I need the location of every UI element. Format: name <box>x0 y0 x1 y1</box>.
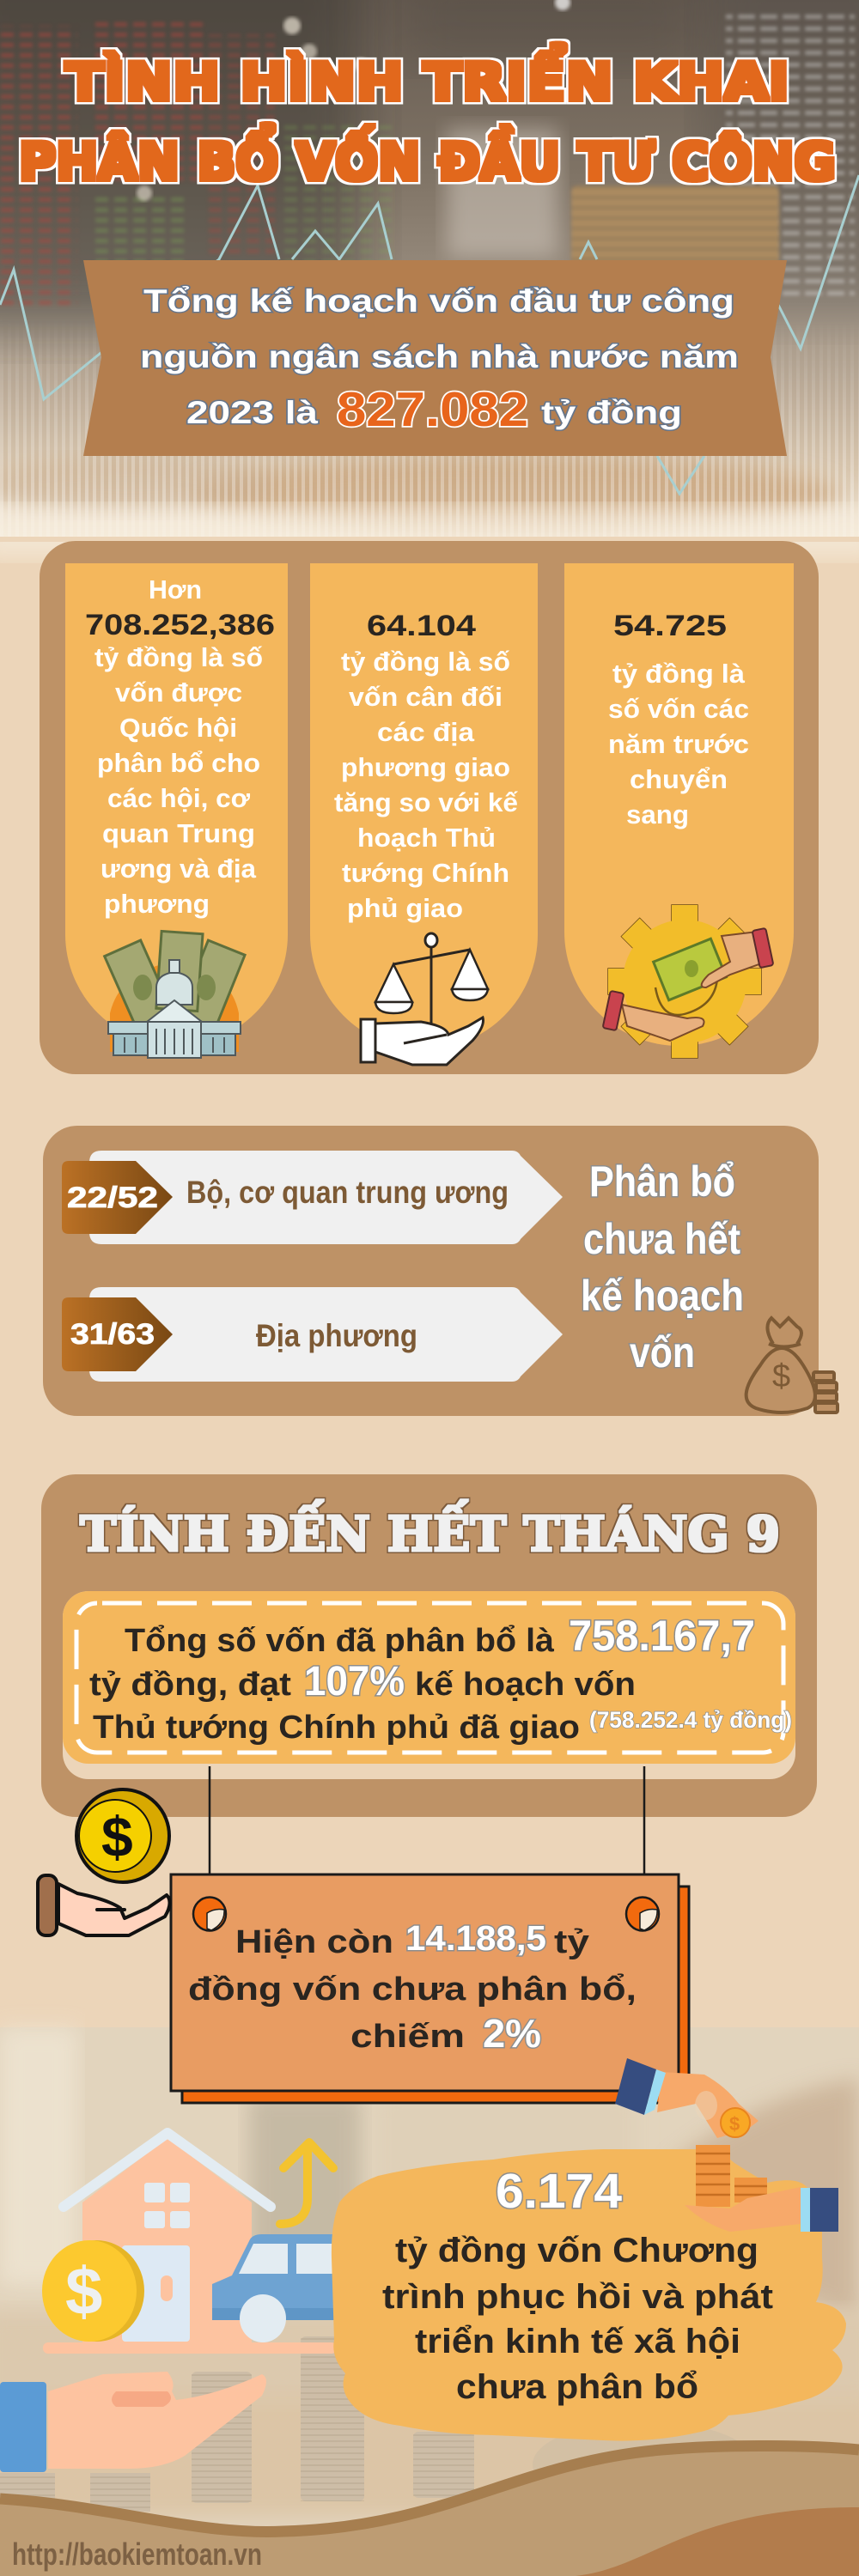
column 1: 708.252,386: vốn được <box>115 677 242 708</box>
allocated summary box: Thủ tướng Chính phủ đã giao <box>93 1710 580 1746</box>
title <box>19 42 836 192</box>
header photo background <box>0 0 859 558</box>
icon: scales on hand <box>361 933 488 1065</box>
icon: money and capitol <box>105 931 245 1058</box>
banner: total plan: nguồn ngân sách nhà nước năm <box>140 339 739 374</box>
icon: money bag <box>746 1318 838 1413</box>
footer url: http://baokiemtoan.vn <box>12 2537 262 2572</box>
hanging strings <box>210 1766 644 1914</box>
heading: allocation not complete <box>581 1157 744 1376</box>
column 1: 708.252,386: phân bổ cho <box>97 748 260 778</box>
callout blob: 6.174: triển kinh tế xã hội <box>415 2323 740 2360</box>
sign hole left <box>193 1898 226 1930</box>
banner: total plan: 827.082 <box>337 382 528 437</box>
sign: remaining unallocated <box>171 1874 689 2103</box>
allocated summary box: kế hoạch vốn <box>415 1667 636 1703</box>
callout blob: 6.174: 6.174 <box>496 2164 622 2219</box>
allocated summary box <box>63 1591 795 1779</box>
column 2: 64.104: 64.104 <box>367 610 476 642</box>
column 2: 64.104: tướng Chính <box>342 858 509 888</box>
row: ministries arrow: 22/52 <box>67 1182 158 1214</box>
row: ministries arrow: Bộ, cơ quan trung ương <box>186 1175 509 1210</box>
banner: total plan: 2023 là <box>186 395 319 430</box>
column 1: 708.252,386: tỷ đồng là số <box>94 642 263 672</box>
panel: as of end of September <box>41 1474 817 1817</box>
illustration: house, car and coin on hand <box>0 2133 337 2472</box>
row: ministries arrow <box>62 1151 563 1244</box>
column 1: 708.252,386: Hơn <box>149 574 202 605</box>
column 2: 64.104: vốn cân đối <box>349 682 503 712</box>
sign: remaining unallocated: 2% <box>483 2011 541 2056</box>
banner: total plan <box>83 260 787 456</box>
icon: dollar coin <box>42 2240 144 2342</box>
column 1: 708.252,386: quan Trung <box>102 818 255 848</box>
panel: three capital figures <box>40 541 819 1074</box>
bottom photo background <box>0 2027 859 2576</box>
icon: gear and money exchange <box>603 905 773 1058</box>
banner: total plan: tỷ đồng <box>541 395 682 430</box>
title: PHÂN BỔ VỐN ĐẦU TƯ CÔNG <box>19 122 836 192</box>
column 3: 54.725: chuyển <box>630 764 728 794</box>
icon: growth arrow <box>280 2142 333 2224</box>
sign: remaining unallocated: 14.188,5 <box>405 1918 546 1958</box>
column 3: 54.725: 54.725 <box>613 610 727 642</box>
callout blob: 6.174: tỷ đồng vốn Chương <box>395 2232 758 2269</box>
column 3: 54.725: tỷ đồng là <box>612 659 746 689</box>
allocated summary box: 107% <box>304 1659 405 1704</box>
icon: coin over open hand: $ <box>101 1805 133 1868</box>
allocated summary box: (758.252.4 tỷ đồng) <box>589 1707 792 1733</box>
column 2: 64.104: hoạch Thủ <box>357 823 496 853</box>
column 3: 54.725 <box>564 563 794 1046</box>
heading: allocation not complete: kế hoạch <box>581 1272 744 1320</box>
column 1: 708.252,386: ương và địa <box>101 854 257 884</box>
heading: allocation not complete: vốn <box>630 1328 695 1376</box>
panel: not fully allocated <box>43 1126 838 1416</box>
column 1: 708.252,386: Quốc hội <box>119 713 237 743</box>
column 3: 54.725: năm trước <box>608 729 749 759</box>
icon: supporting hand <box>0 2372 266 2472</box>
row: localities arrow: 31/63 <box>70 1318 155 1351</box>
column 2: 64.104: tỷ đồng là số <box>341 647 510 677</box>
allocated summary box: Tổng số vốn đã phân bổ là <box>125 1623 555 1659</box>
sign: remaining unallocated: chiếm <box>350 2019 465 2055</box>
column 2: 64.104 <box>310 563 538 1049</box>
sign: remaining unallocated: đồng vốn chưa phân bổ, <box>188 1971 637 2008</box>
icon: coin over open hand <box>38 1789 170 1935</box>
row: localities arrow: Địa phương <box>256 1318 417 1353</box>
callout blob: 6.174 <box>332 2149 846 2441</box>
allocated summary box: 758.167,7 <box>569 1612 755 1660</box>
icon: car <box>212 2234 334 2342</box>
heading: allocation not complete: Phân bổ <box>589 1157 735 1206</box>
icon: hand dropping coin: $ <box>729 2113 740 2135</box>
icon: hand dropping coin <box>615 2058 758 2138</box>
column 1: 708.252,386: phương <box>104 889 210 919</box>
callout blob: 6.174: chưa phân bổ <box>456 2368 698 2406</box>
icon: money bag: $ <box>772 1358 790 1394</box>
column 3: 54.725: sang <box>626 799 689 829</box>
column 2: 64.104: phương giao <box>341 752 510 782</box>
callout blob: 6.174: trình phục hồi và phát <box>382 2278 773 2316</box>
platform <box>43 2342 337 2354</box>
icon: dollar coin: $ <box>65 2253 102 2329</box>
banner: total plan: Tổng kế hoạch vốn đầu tư công <box>143 283 734 319</box>
allocated summary box: tỷ đồng, đạt <box>89 1667 291 1703</box>
row: localities arrow <box>62 1287 563 1382</box>
column 1: 708.252,386: 708.252,386 <box>85 609 275 641</box>
column 1: 708.252,386: các hội, cơ <box>107 783 251 813</box>
title: TÌNH HÌNH TRIỂN KHAI <box>65 42 789 112</box>
column 3: 54.725: số vốn các <box>608 694 749 724</box>
page top cream band <box>0 537 859 542</box>
column 1: 708.252,386 <box>65 563 288 1046</box>
column 2: 64.104: các địa <box>377 717 475 747</box>
column 2: 64.104: phủ giao <box>347 893 463 923</box>
house <box>64 2133 271 2343</box>
sign: remaining unallocated: tỷ <box>554 1924 589 1960</box>
heading: allocation not complete: chưa hết <box>583 1215 740 1263</box>
bottom wave footer <box>0 2445 859 2576</box>
sign hole right <box>626 1898 659 1930</box>
column 2: 64.104: tăng so với kế <box>334 787 519 817</box>
sign: remaining unallocated: Hiện còn <box>235 1924 393 1960</box>
icon: coins stack on hand <box>685 2145 838 2232</box>
heading: TÍNH ĐẾN HẾT THÁNG 9 <box>80 1499 780 1563</box>
